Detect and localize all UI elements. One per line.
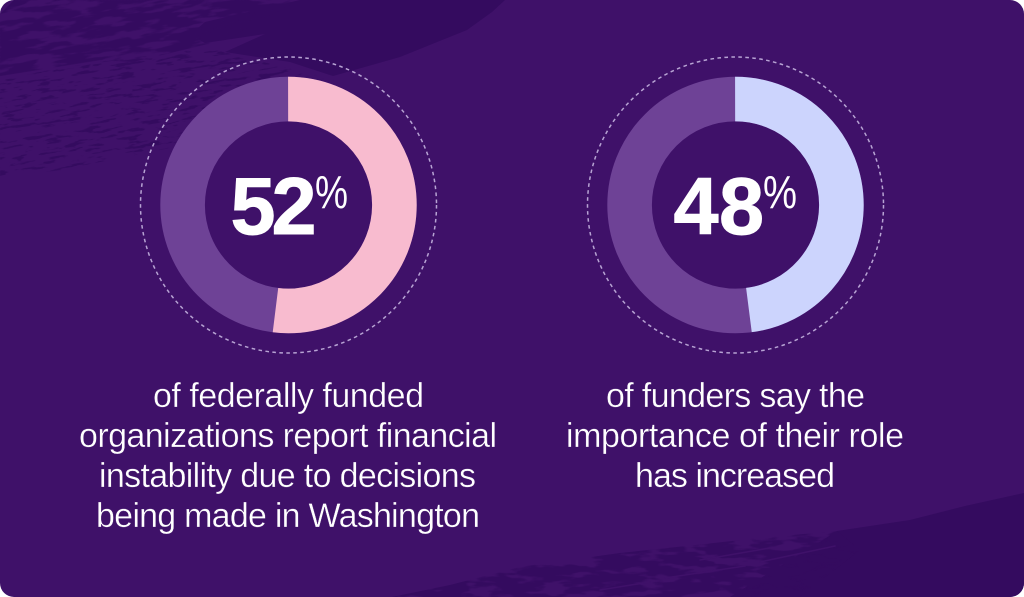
text block: 48% description: of funders say the xyxy=(606,377,865,415)
donut chart: 48% xyxy=(588,57,884,353)
value: 52%: % xyxy=(315,166,348,218)
text block: 52% description: instability due to decisions xyxy=(99,457,476,495)
text block: 52% description: being made in Washington xyxy=(96,497,480,535)
dashed outer ring xyxy=(588,57,884,353)
brush texture: top left xyxy=(0,0,505,178)
dashed outer ring xyxy=(140,57,436,353)
donut remainder segment xyxy=(630,99,841,311)
text block: 52% description: organizations report financial xyxy=(79,417,497,455)
donut remainder segment xyxy=(183,99,394,311)
text block: 52% description: of federally funded xyxy=(153,377,424,415)
brush texture: bottom right xyxy=(392,493,1024,597)
donut chart: 52% xyxy=(140,57,436,353)
value: 52%: 52 xyxy=(230,162,316,252)
donut 52 percent segment xyxy=(183,99,394,311)
value: 48%: % xyxy=(763,166,797,218)
text block: 48% description: has increased xyxy=(635,457,835,495)
value: 48%: 48 xyxy=(674,162,764,252)
donut 48 percent segment xyxy=(630,99,841,311)
text block: 48% description: importance of their role xyxy=(566,417,904,455)
